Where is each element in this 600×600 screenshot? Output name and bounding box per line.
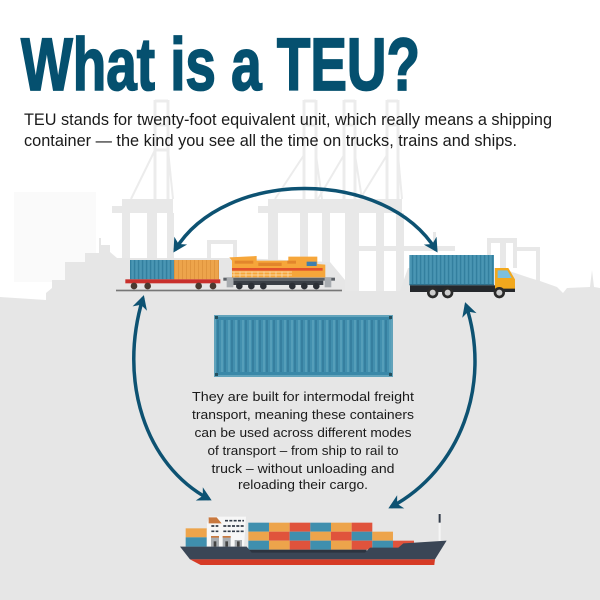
faint city backdrop — [14, 192, 96, 282]
text: intermodal description: can be used across different modes — [194, 425, 412, 440]
icon: shipping container — [214, 315, 393, 377]
intro text: TEU stands for twenty-foot equivalent unit, which really means a shipping — [24, 111, 552, 129]
intro text — [24, 111, 552, 150]
text: intermodal description: They are built for intermodal freight — [192, 389, 414, 404]
text: intermodal description — [192, 389, 415, 492]
crane towers — [131, 100, 402, 199]
intro text: container — the kind you see all the time on trucks, trains and ships. — [24, 132, 517, 150]
text: intermodal description: truck – without unloading and — [212, 461, 394, 476]
text: intermodal description: transport, meaning these containers — [192, 407, 415, 422]
text: intermodal description: of transport – from ship to rail to — [208, 443, 398, 458]
arrow: train to ship arc — [134, 298, 209, 499]
title: What is a TEU? — [21, 23, 420, 106]
icon: train — [116, 256, 342, 291]
ground silhouette — [0, 238, 600, 600]
arrow: truck to ship arc — [391, 305, 475, 507]
arrow: train to truck arc — [175, 188, 436, 250]
crane platforms and legs — [112, 199, 540, 293]
icon: truck — [409, 255, 515, 298]
icon: container ship — [180, 513, 447, 565]
text: intermodal description: reloading their cargo. — [238, 477, 368, 492]
